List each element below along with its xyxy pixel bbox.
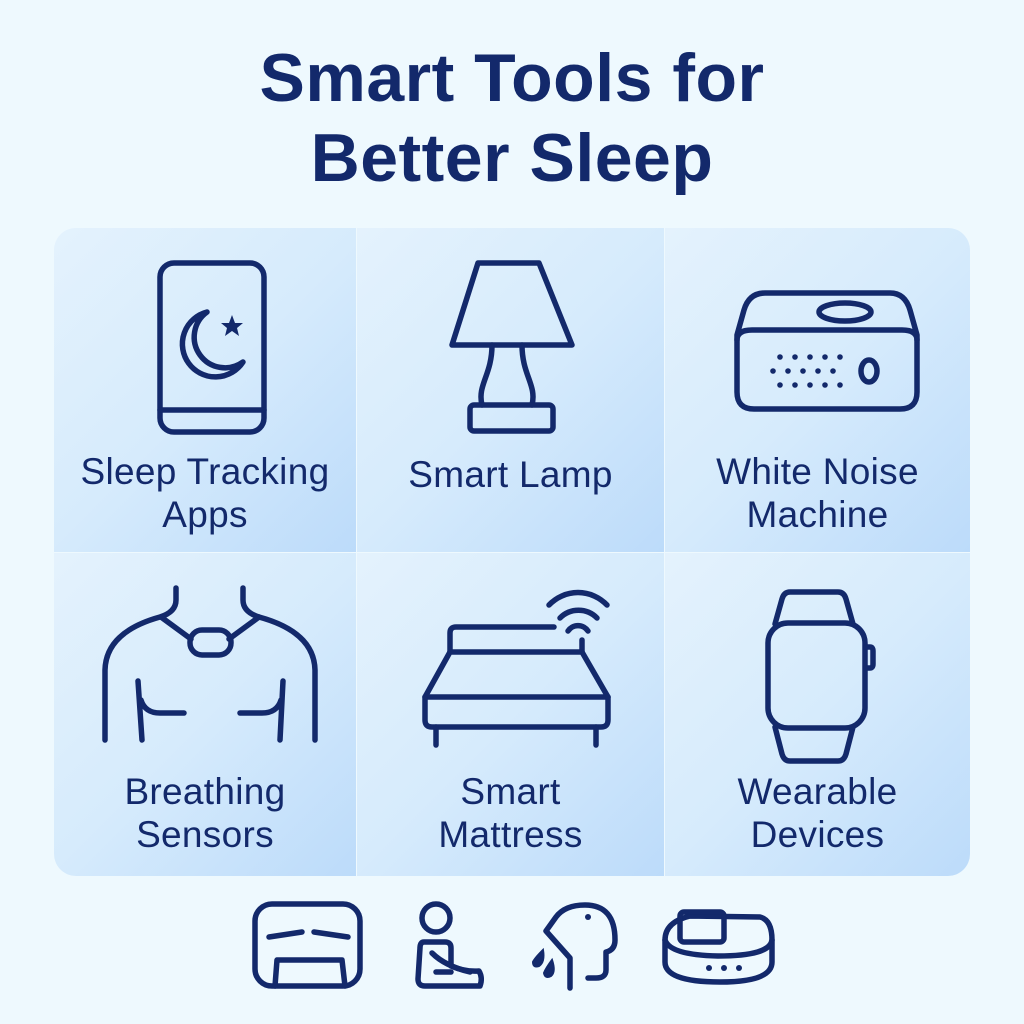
label: Machine	[747, 494, 888, 535]
icon: lamp	[449, 260, 575, 434]
icon: noise machine	[734, 290, 920, 412]
icon: sleep mask	[255, 904, 360, 986]
label: Devices	[751, 814, 884, 855]
title: Smart Tools for	[260, 40, 764, 116]
label	[81, 451, 329, 535]
panel: sleep tracking apps	[54, 228, 356, 552]
icon: torso with sensor	[102, 585, 318, 743]
icon: bed with wifi	[422, 590, 611, 748]
label: Smart	[460, 771, 561, 812]
label	[438, 771, 583, 855]
label: Apps	[162, 494, 248, 535]
icon: seated person	[418, 904, 481, 986]
icon: phone with moon	[157, 260, 267, 435]
panel: white noise machine	[665, 228, 970, 552]
icon: head with drops	[533, 905, 615, 988]
title: Better Sleep	[311, 120, 713, 196]
title	[260, 40, 764, 196]
label: Sensors	[136, 814, 274, 855]
icon: smartwatch	[765, 589, 876, 764]
panel: smart mattress	[357, 553, 664, 876]
label: Mattress	[438, 814, 583, 855]
label: Smart Lamp	[408, 454, 613, 495]
label: White Noise	[716, 451, 919, 492]
panel: wearable devices	[665, 553, 970, 876]
panel: smart lamp	[357, 228, 664, 552]
label	[124, 771, 286, 855]
panel grid	[54, 228, 970, 876]
icon: fitness band	[665, 912, 772, 982]
panel: breathing sensors	[54, 553, 356, 876]
label: Wearable	[737, 771, 898, 812]
label	[716, 451, 919, 535]
label	[737, 771, 898, 855]
label: Breathing	[124, 771, 286, 812]
label: Sleep Tracking	[81, 451, 329, 492]
